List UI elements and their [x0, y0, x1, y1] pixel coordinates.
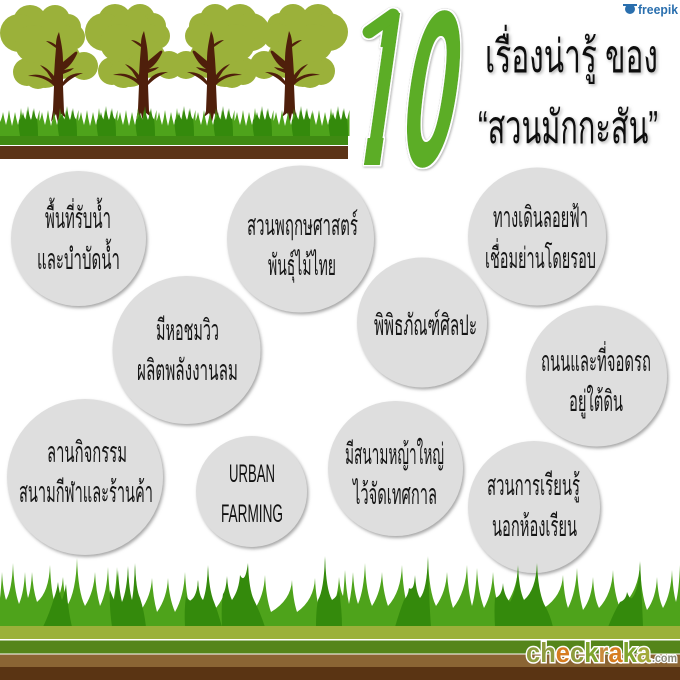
- panel: activity grounds: [7, 399, 163, 555]
- panel: art museum: [357, 258, 487, 388]
- panel: urban farming: [196, 436, 307, 547]
- panel: festival lawn: มีสนามหญ้าใหญ่: [345, 437, 444, 471]
- panel: botanical garden: สวนพฤกษศาสตร์: [247, 209, 358, 242]
- panel: art museum: พิพิธภัณฑ์ศิลปะ: [374, 309, 477, 342]
- panel: activity grounds: สนามกีฬาและร้านค้า: [19, 477, 153, 509]
- panel: festival lawn: ไว้จัดเทศกาล: [352, 477, 437, 511]
- panel: activity grounds: ลานกิจกรรม: [47, 437, 127, 469]
- panel: skywalk: ทางเดินลอยฟ้า: [493, 202, 588, 234]
- panel: outdoor learning: สวนการเรียนรู้: [487, 470, 580, 503]
- ground strips: [0, 136, 348, 159]
- grass row: [0, 106, 350, 136]
- soil strips: [0, 626, 680, 680]
- panel: viewing tower: [112, 276, 260, 424]
- grass tufts dark: [43, 582, 72, 627]
- checkraka logo: checkraka: [526, 637, 651, 668]
- tree 1: [0, 5, 98, 123]
- panel: outdoor learning: [468, 441, 600, 573]
- big number 10: [360, 6, 464, 172]
- title: [478, 24, 658, 153]
- illustration: row of trees on grass: [0, 4, 350, 159]
- panel: water retention: และบำบัดน้ำ: [37, 238, 120, 276]
- panel: underground parking: อยู่ใต้ดิน: [569, 384, 623, 419]
- panel: viewing tower: ผลิตพลังงานลม: [137, 355, 238, 387]
- panel: urban farming: FARMING: [221, 500, 283, 528]
- panel: viewing tower: มีหอชมวิว: [156, 315, 219, 347]
- panel: botanical garden: [227, 166, 374, 312]
- panel: botanical garden: พันธุ์ไม้ไทย: [268, 248, 336, 283]
- panel: underground parking: [526, 306, 667, 446]
- tree 3: [172, 4, 270, 122]
- freepik logo: freepik: [638, 2, 679, 17]
- illustration: bottom grass and soil: [0, 556, 680, 680]
- checkraka logo: .com: [652, 651, 677, 665]
- tree 2: [85, 4, 183, 122]
- panel: outdoor learning: นอกห้องเรียน: [492, 511, 577, 543]
- panel: urban farming: URBAN: [229, 460, 275, 488]
- panel: water retention: [11, 171, 146, 306]
- panel: festival lawn: [328, 401, 463, 536]
- tree 4: [250, 4, 348, 122]
- grass silhouette light: [0, 558, 680, 627]
- panel: skywalk: [468, 168, 606, 306]
- panel: water retention: พื้นที่รับน้ำ: [45, 197, 111, 235]
